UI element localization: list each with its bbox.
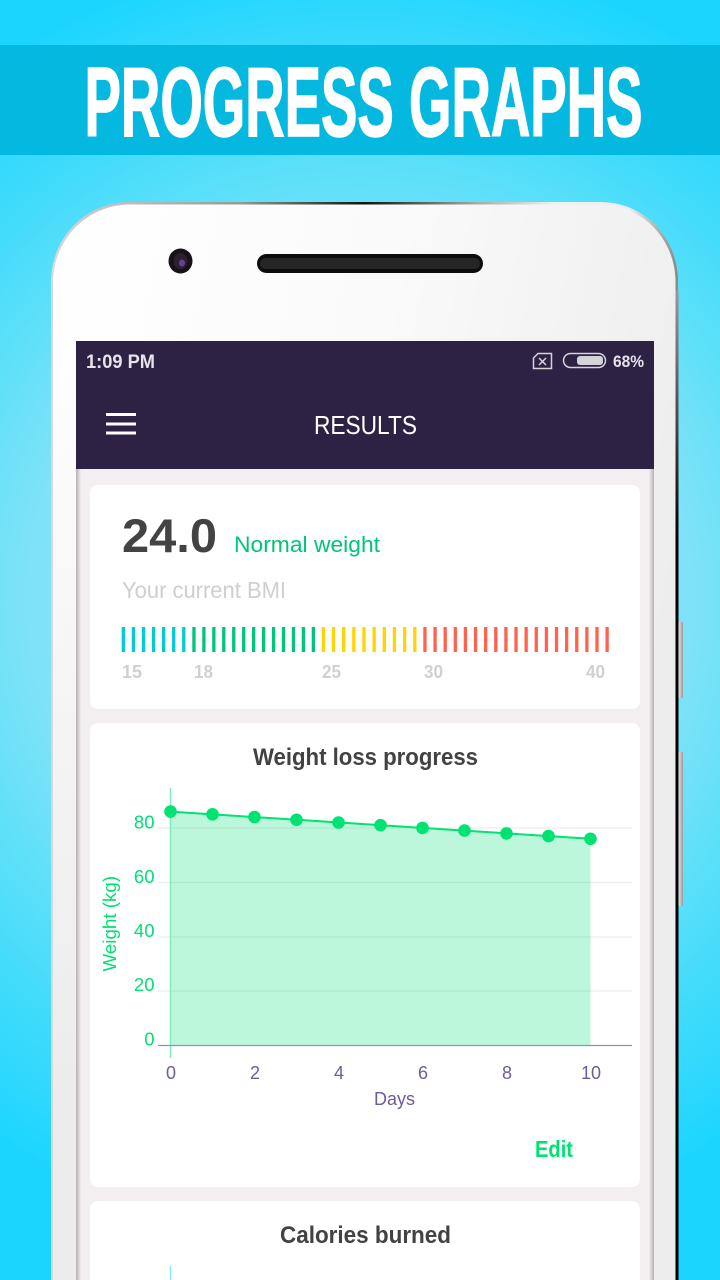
side button: lower: [678, 752, 683, 906]
x labels: 6: [418, 1063, 428, 1083]
x labels: 10: [581, 1063, 601, 1083]
BMI scale labels: 15: [122, 661, 142, 682]
data line: [170, 812, 590, 839]
chart title: Weight loss progress: [253, 744, 478, 771]
phone body: [51, 202, 678, 1280]
title banner: [0, 45, 720, 157]
BMI caption: Your current BMI: [122, 577, 286, 603]
icon: menu: [106, 413, 136, 434]
grid lines: [158, 828, 632, 991]
camera: [168, 248, 192, 274]
x axis title: Days: [374, 1089, 415, 1109]
y labels: 60: [134, 866, 154, 887]
panel: weight loss progress: [90, 723, 640, 1187]
battery percent: 68%: [613, 352, 644, 371]
y axis: [170, 1266, 172, 1280]
BMI scale labels: 30: [424, 661, 443, 682]
panel: BMI: [90, 485, 640, 709]
icon: battery: [564, 354, 606, 368]
x labels: 4: [334, 1063, 344, 1083]
x labels: [166, 1063, 601, 1083]
speaker: [257, 254, 483, 273]
panel: calories burned: [90, 1201, 640, 1280]
chart title: Calories burned: [280, 1222, 451, 1249]
BMI scale labels: 18: [194, 661, 213, 682]
BMI scale: [122, 627, 609, 652]
line chart: [99, 788, 632, 1109]
side button: upper: [678, 622, 683, 698]
x axis: [158, 1044, 632, 1046]
area fill: [170, 812, 590, 1046]
icon: no sim: [534, 354, 552, 368]
BMI value: 24.0: [122, 509, 217, 562]
y axis: [170, 788, 172, 1058]
screen title: RESULTS: [314, 410, 417, 440]
clock: 1:09 PM: [86, 352, 155, 373]
data points: [164, 805, 597, 845]
BMI status: Normal weight: [234, 532, 380, 557]
app header: [76, 341, 654, 469]
screen: [76, 341, 654, 1280]
x labels: 0: [166, 1063, 176, 1083]
y labels: 20: [134, 974, 154, 995]
y labels: [134, 812, 154, 1050]
y labels: 0: [144, 1028, 154, 1050]
y labels: 80: [134, 812, 154, 832]
BMI scale labels: 40: [586, 661, 605, 682]
screen shadow right: [649, 469, 654, 1280]
screen shadow left: [76, 469, 81, 1280]
y labels: 40: [134, 920, 154, 941]
BMI scale labels: 25: [322, 661, 341, 682]
x labels: 8: [502, 1063, 512, 1083]
y axis title: Weight (kg): [99, 876, 120, 972]
BMI scale labels: [122, 661, 605, 682]
x labels: 2: [250, 1063, 260, 1083]
edit link: Edit: [535, 1136, 573, 1162]
phone: [51, 202, 683, 1280]
